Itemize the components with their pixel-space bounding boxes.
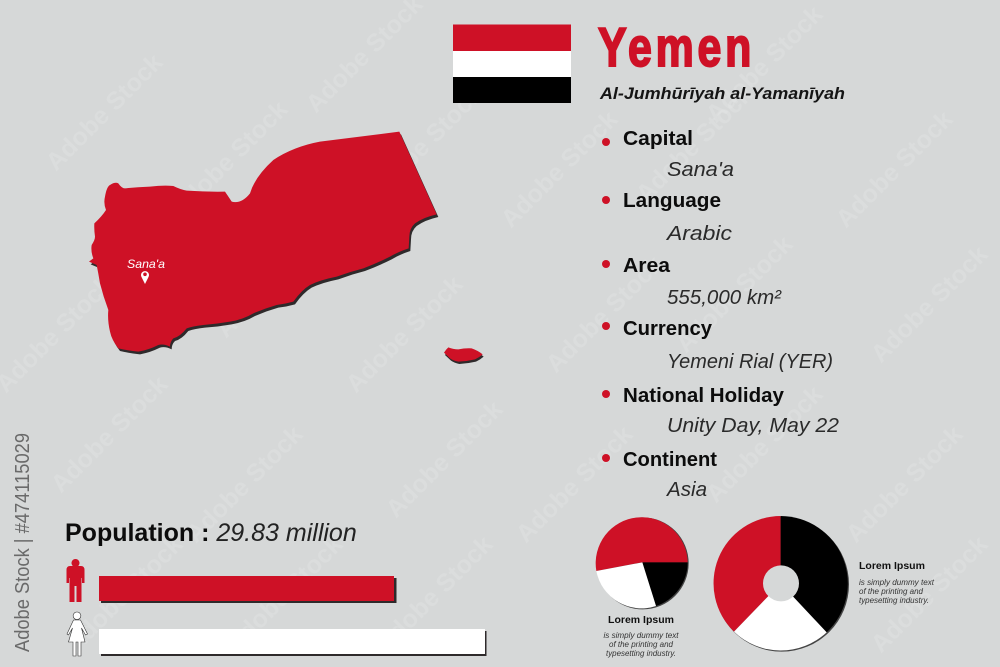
fact: capital: Capital [623,128,693,150]
fact: currency [602,318,833,373]
text: Adobe Stock [510,420,638,548]
fact: continent: Asia [666,479,707,501]
text: Adobe Stock [700,380,828,508]
text: Adobe Stock [180,420,308,548]
donut chart: large [714,516,849,652]
fact: currency: Currency [623,318,713,340]
fact: currency: Yemeni Rial (YER) [667,351,833,373]
text: Adobe Stock [495,105,623,233]
text: Adobe Stock [380,395,508,523]
text: Adobe Stock [540,250,668,378]
icon: male figure [66,559,84,602]
bar: female population [99,629,486,656]
fact list [602,128,839,501]
subtitle: Al-Jumhūrīyah al-Yamanīyah [599,85,845,103]
text: Adobe Stock [865,240,993,368]
fact: capital [602,128,734,181]
text: Adobe Stock [40,48,168,176]
text: Adobe Stock [670,230,798,358]
fact: language [602,190,732,245]
donut caption: typesetting industry. [859,596,929,605]
text: Adobe Stock [865,530,993,658]
fact: language: Arabic [666,223,732,245]
pie caption: small: of the printing and [609,640,674,649]
population heading: Population : 29.83 million [65,519,357,547]
map label: capital: Sana'a [127,257,165,271]
pie caption: small: is simply dummy text [604,631,679,640]
map: Yemen [89,132,484,364]
donut caption: Lorem Ipsum [859,560,925,572]
icon: female figure [67,612,88,656]
flag of Yemen [453,24,571,103]
text: Adobe Stock [220,530,348,658]
text: Adobe Stock [840,420,968,548]
stock id text: Adobe Stock | #474115029 [12,433,34,652]
fact: national holiday [602,385,839,437]
fact: continent: Continent [623,449,717,471]
text: Adobe Stock [360,80,488,208]
donut caption [859,560,935,605]
text: Adobe Stock [210,215,338,343]
fact: area: Area [623,255,671,277]
text: Adobe Stock [45,370,173,498]
fact: area: 555,000 km² [667,287,782,309]
donut caption: of the printing and [859,587,924,596]
pie caption: small: typesetting industry. [606,649,676,658]
fact: national holiday: National Holiday [623,385,785,407]
pie caption: small [604,614,679,658]
icon: location pin [141,271,149,284]
title: Yemen [598,17,755,78]
fact: capital: Sana'a [667,159,734,181]
text: Adobe Stock [700,0,828,128]
text: Adobe Stock [630,80,758,208]
text: Adobe Stock [340,270,468,398]
bar: male population [99,576,396,603]
fact: language: Language [623,190,721,212]
pie caption: small: Lorem Ipsum [608,614,674,626]
fact: continent [602,449,717,501]
text: Adobe Stock [60,530,188,658]
text: Adobe Stock [165,95,293,223]
donut caption: is simply dummy text [859,578,935,587]
text: Adobe Stock [830,105,958,233]
fact: national holiday: Unity Day, May 22 [667,415,839,437]
pie chart: small [596,517,689,609]
text: Adobe Stock [370,530,498,658]
fact: area [602,255,782,309]
